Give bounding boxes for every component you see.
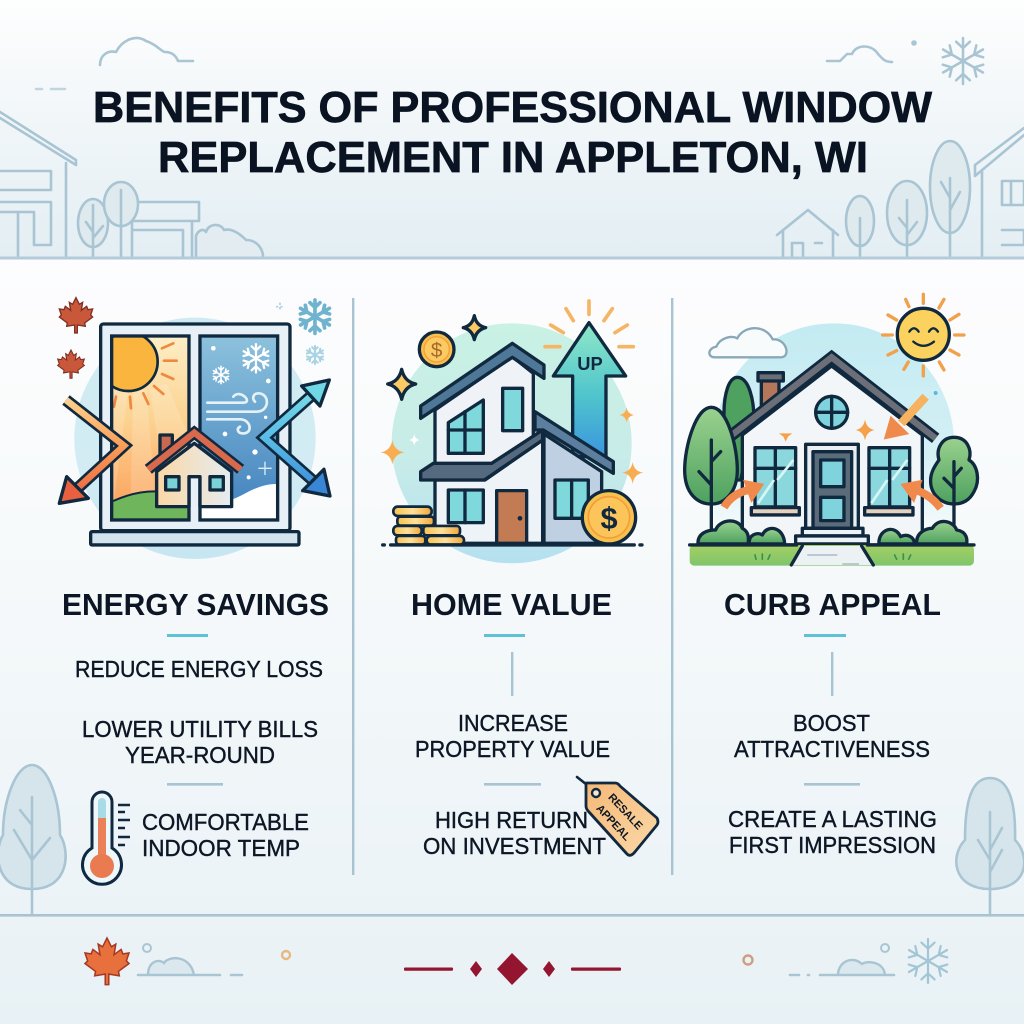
accent: [484, 634, 525, 637]
left tree: [685, 407, 737, 543]
back tree: [724, 377, 754, 480]
icon background circle: [392, 323, 632, 563]
right bottom tree: [956, 778, 1024, 915]
icon: header snowflake: [940, 38, 986, 84]
icon: thermometer: [82, 792, 130, 884]
sparkles: [779, 419, 875, 442]
heading: CURB APPEAL: [724, 587, 941, 622]
window frame: [101, 324, 290, 531]
small dollar coin: $: [431, 339, 443, 362]
benefit: REDUCE ENERGY LOSS: [75, 656, 323, 682]
benefit: HIGH RETURN: [435, 807, 588, 833]
footer left: maple leaf and cloud: [85, 938, 290, 985]
small house: [148, 433, 241, 507]
title: [93, 83, 932, 182]
header neighbourhood line art, right: [777, 128, 1024, 257]
front door: [806, 444, 858, 528]
icon: home value house: [381, 301, 643, 563]
icon: resale appeal tag: APPEAL: [593, 803, 633, 844]
icon: resale appeal tag: [577, 777, 658, 855]
sparkles: [381, 316, 643, 484]
benefit: LOWER UTILITY BILLS: [82, 716, 318, 742]
right tree: [931, 437, 978, 543]
panel: energy savings text: [62, 587, 329, 884]
arrow: cold air blue: [264, 380, 330, 496]
footer centre ornament: [404, 953, 621, 985]
heading: ENERGY SAVINGS: [62, 587, 329, 622]
maple leaves: [58, 298, 93, 378]
icon background circle: [714, 323, 954, 527]
window sill: [91, 532, 299, 545]
chimney: [758, 373, 783, 405]
benefit: [734, 710, 930, 762]
icon: resale appeal tag: RESALE: [605, 792, 645, 832]
icon: curb appeal house: [685, 294, 978, 566]
panel: curb appeal text: [724, 587, 941, 858]
round window: [816, 396, 848, 428]
accent: [804, 634, 846, 637]
column divider right: [671, 298, 673, 875]
benefit: CREATE A LASTING: [728, 806, 937, 832]
benefit: FIRST IMPRESSION: [729, 832, 936, 858]
benefit: COMFORTABLE: [142, 809, 309, 835]
small dollar coin: [419, 332, 454, 367]
big dollar coin: [582, 491, 636, 544]
header clouds: [36, 38, 916, 89]
warm pane: [113, 338, 188, 518]
lawn: [690, 545, 974, 566]
outside snowflakes: [276, 300, 332, 364]
benefit: ATTRACTIVENESS: [734, 736, 930, 762]
footer right: cloud and snowflake: [744, 939, 950, 983]
header background: [0, 0, 1024, 258]
cold pane: [200, 336, 278, 520]
benefit: PROPERTY VALUE: [415, 736, 610, 762]
benefit: ON INVESTMENT: [423, 833, 606, 859]
panel: home value text: [411, 587, 658, 859]
body background: [0, 258, 1024, 1024]
benefit: [142, 809, 309, 861]
cloud: [709, 328, 787, 357]
benefit: [728, 806, 937, 858]
arrow: value up: UP: [577, 353, 603, 374]
benefit: BOOST: [793, 710, 870, 736]
header ground line: [0, 256, 1024, 260]
steps: [796, 528, 868, 544]
pane outlines: [112, 336, 278, 520]
smiling sun: [883, 294, 964, 376]
icon: energy savings window: [58, 298, 332, 559]
big dollar coin: $: [600, 501, 618, 535]
arrows: sun toward windows: [724, 397, 941, 508]
footer ground line: [0, 914, 1024, 917]
arrow: value up: [545, 301, 633, 457]
lower storey: [421, 412, 613, 543]
left bottom tree: [0, 765, 66, 915]
benefit: YEAR-ROUND: [125, 742, 275, 768]
title: REPLACEMENT IN APPLETON, WI: [158, 133, 868, 182]
benefit: [415, 710, 610, 762]
column divider left: [352, 298, 354, 875]
benefit: INCREASE: [458, 710, 568, 736]
ground line: [690, 540, 974, 550]
left window: [751, 448, 799, 515]
icon background circle: [74, 318, 316, 559]
right window: [865, 448, 913, 515]
ground line: [383, 540, 642, 550]
title: BENEFITS OF PROFESSIONAL WINDOW: [93, 83, 932, 132]
shrubs: [698, 521, 967, 544]
benefit: [82, 716, 318, 768]
roof: [731, 357, 936, 438]
arrow: heat loss orange: [59, 400, 124, 503]
house walls: [742, 366, 922, 545]
accent: [167, 634, 208, 637]
upper storey: [421, 343, 544, 467]
benefit: INDOOR TEMP: [142, 835, 300, 861]
heading: HOME VALUE: [411, 587, 612, 622]
coin stack: [393, 507, 464, 545]
header neighbourhood line art, left: [0, 112, 263, 257]
benefit: [423, 807, 606, 859]
